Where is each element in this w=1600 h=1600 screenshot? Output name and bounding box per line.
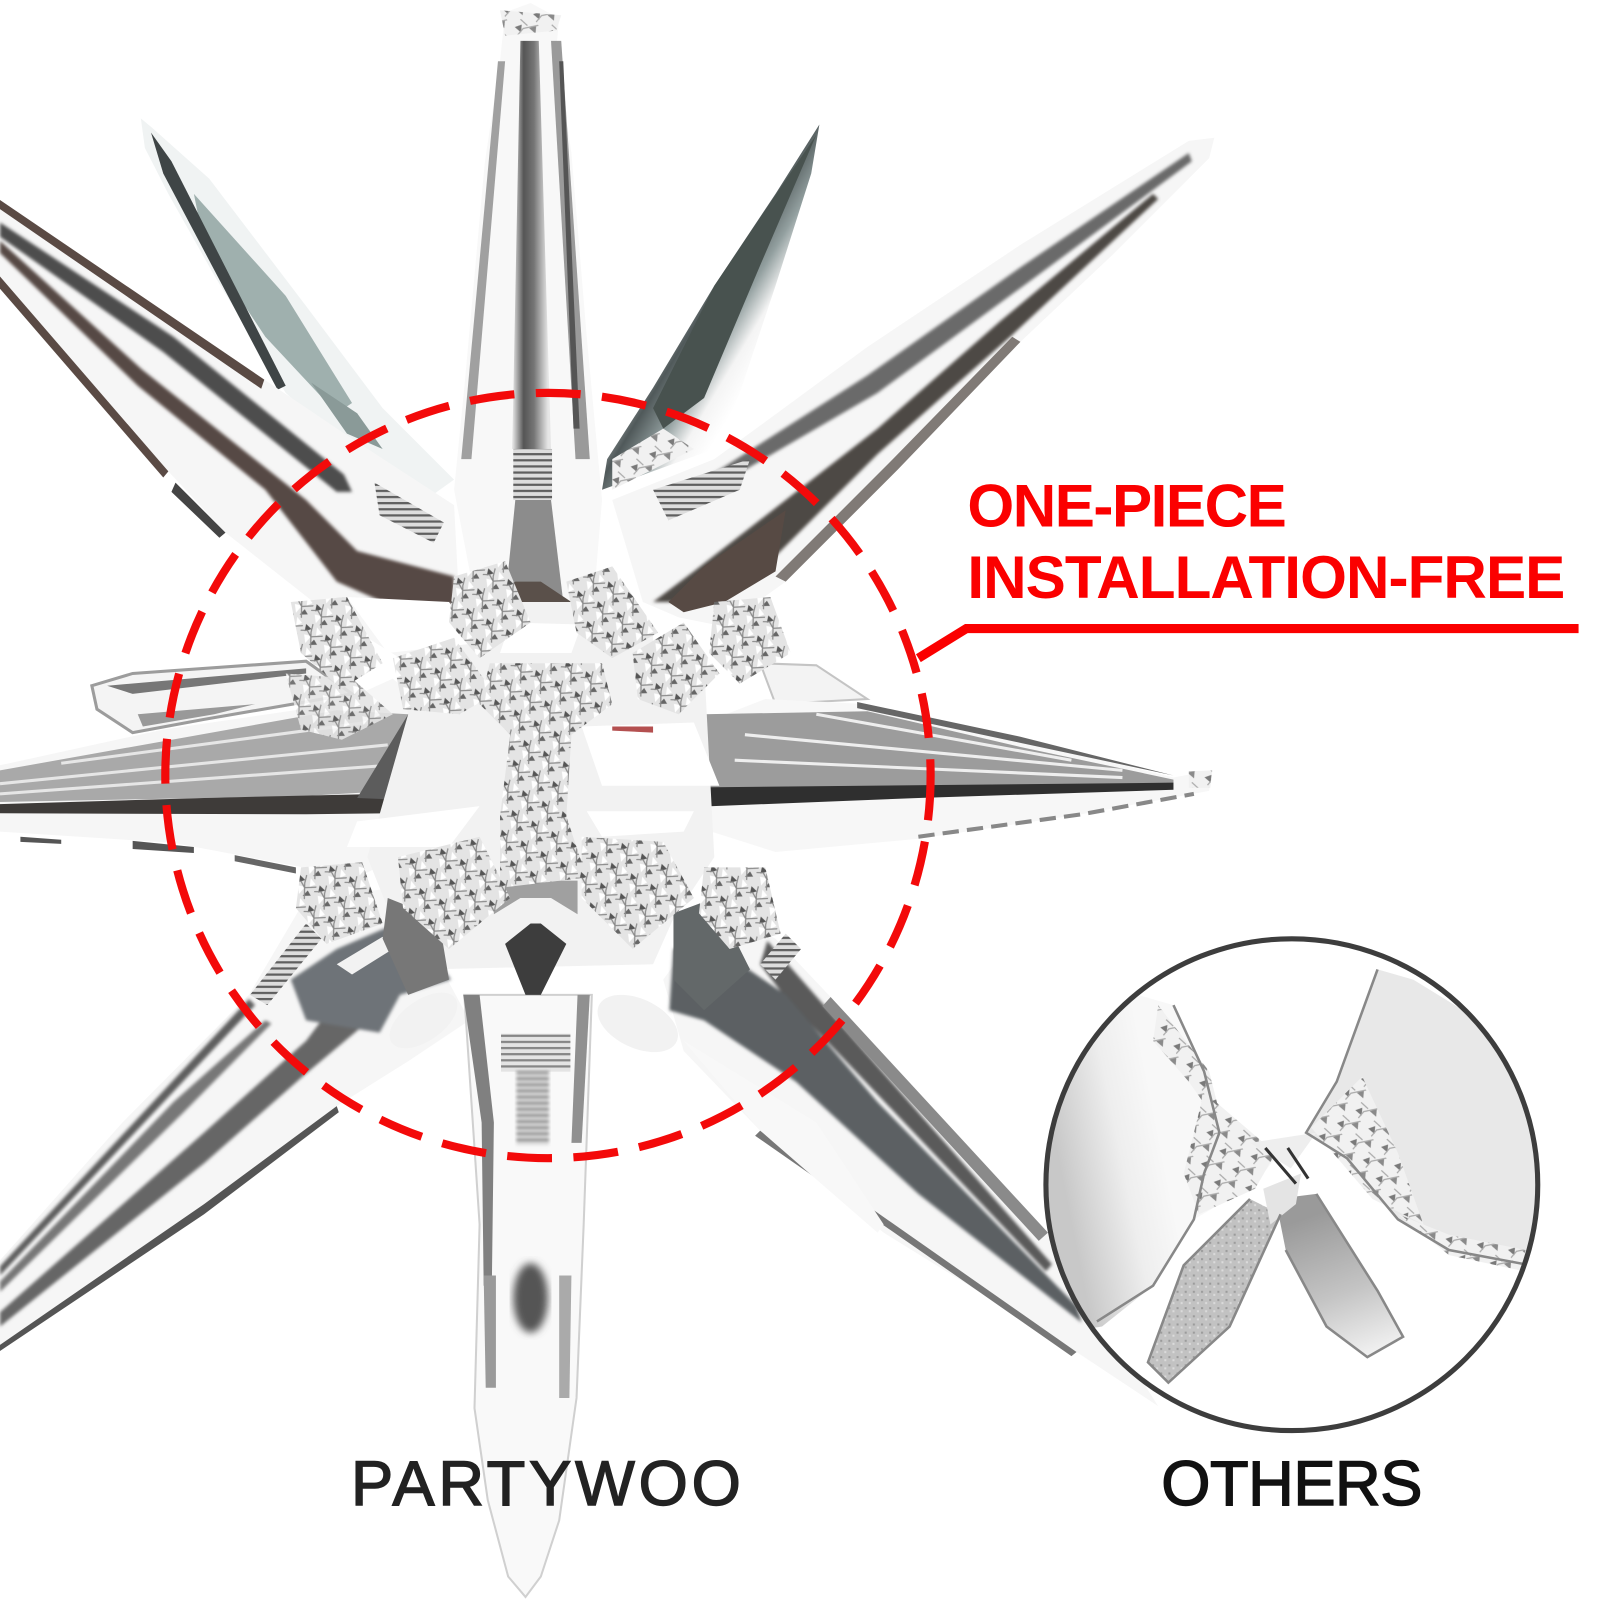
back spike: right flat bbox=[760, 663, 867, 704]
star balloon: silver foil with twelve spikes bbox=[0, 3, 1214, 1597]
comparison circle: others, tied balloon bbox=[1041, 939, 1541, 1431]
circle outline bbox=[1046, 939, 1538, 1431]
hub dark reflections bbox=[383, 510, 786, 1010]
callout leader line bbox=[918, 629, 1579, 658]
label: partywoo: PARTYWOO bbox=[351, 1449, 741, 1519]
back spike: upper left bbox=[141, 118, 454, 505]
spike: lower left bbox=[0, 888, 469, 1351]
spike: right bbox=[663, 699, 1212, 852]
tied balloon close-up bbox=[1041, 969, 1541, 1383]
spike: lower right bbox=[589, 908, 1158, 1406]
spike: top bbox=[454, 3, 602, 631]
hub crumpled foil patches bbox=[286, 561, 791, 949]
spike: upper left large bbox=[0, 200, 459, 663]
spike: bottom bbox=[463, 995, 592, 1597]
label: others: OTHERS bbox=[1161, 1449, 1422, 1519]
back spike: far left flat bbox=[92, 661, 352, 733]
spike: upper right large bbox=[612, 138, 1214, 633]
back spike: upper right bbox=[602, 124, 819, 490]
crumpled foil hub bbox=[286, 510, 791, 1010]
callout text line 1: ONE-PIECE bbox=[967, 473, 1287, 540]
spike: left bbox=[0, 679, 488, 878]
callout: one-piece installation-free bbox=[918, 473, 1579, 658]
dashed red circle highlighting the one-piece hub bbox=[165, 393, 931, 1158]
hub white highlights bbox=[347, 597, 719, 847]
callout text line 2: INSTALLATION-FREE bbox=[967, 544, 1565, 611]
